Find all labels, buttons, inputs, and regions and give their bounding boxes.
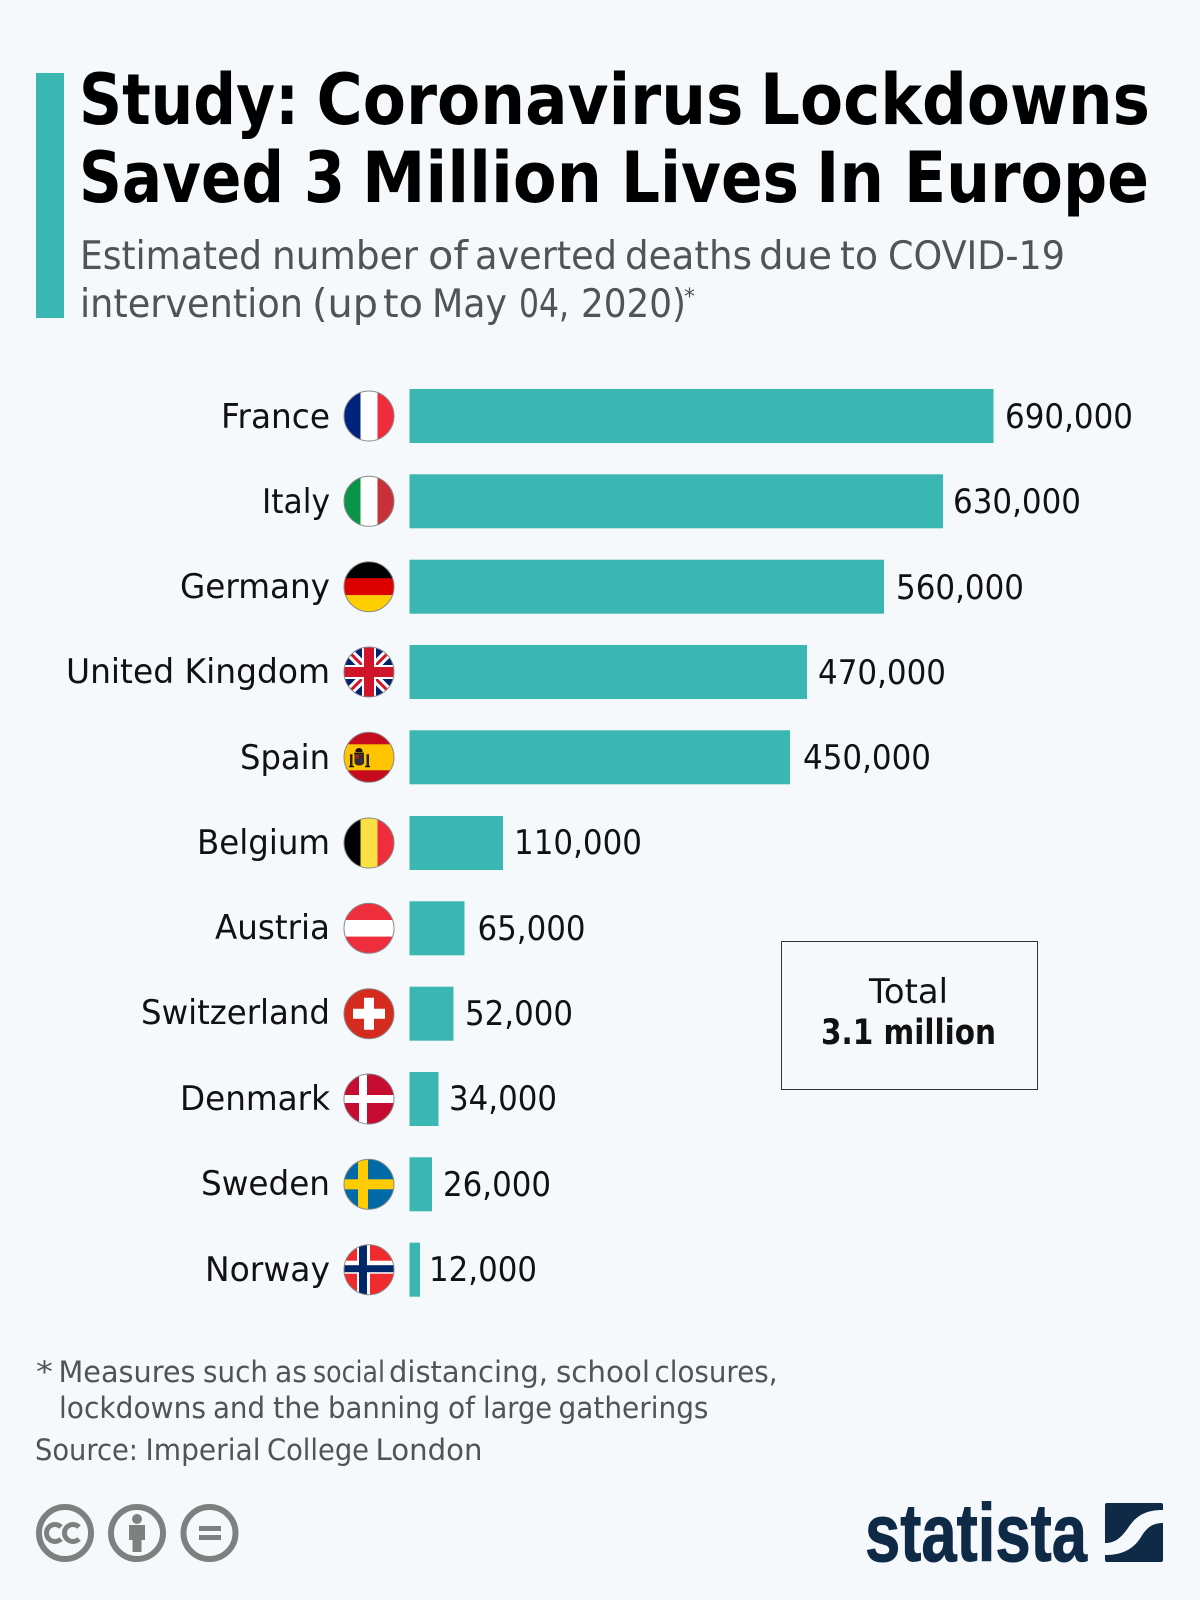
flag: Belgium [344,818,394,868]
source: London [376,1433,482,1467]
subtitle: number [272,234,419,279]
flag: France [344,391,394,441]
row: Switzerland: Switzerland [141,993,330,1033]
title: In [816,137,884,219]
value: Belgium: 110,000 [514,823,642,863]
source: Source: [35,1433,138,1467]
title: Lockdowns [760,59,1150,141]
flag: Spain [344,732,394,782]
icon: attribution [111,1507,163,1559]
value: Germany: 560,000 [896,568,1024,608]
subtitle: intervention [80,282,303,327]
subtitle: averted [475,234,617,279]
flag: Norway [344,1245,394,1295]
row: Norway [205,1243,537,1297]
bar: Belgium [410,816,503,870]
value: Spain: 450,000 [803,738,931,778]
footnote: banning [328,1391,440,1425]
subtitle: to [383,282,423,327]
bar: Norway [410,1243,420,1297]
flag: United Kingdom [344,647,394,697]
bar: France [410,389,994,443]
flag: Germany [344,562,394,612]
callout: total: 3.1 million [821,1013,996,1053]
value: Norway: 12,000 [429,1250,537,1290]
bar chart [66,389,1133,1297]
title: Lives [621,137,799,219]
callout: total: Total [868,972,948,1012]
footnote: social [313,1355,385,1389]
footnote: large [483,1391,552,1425]
bar: Sweden [410,1157,432,1211]
value: Denmark: 34,000 [449,1079,557,1119]
bar: Germany [410,560,884,614]
icon: no derivatives [184,1507,236,1559]
row: Germany [180,560,1024,614]
footnote: such [203,1355,268,1389]
subtitle: to [840,234,878,279]
source [35,1433,482,1467]
subtitle: May [432,282,507,327]
row: Spain [240,730,931,784]
subtitle: 2020) [581,282,686,327]
footnote: * [36,1355,53,1389]
subtitle: of [428,234,469,279]
footnote: gatherings [558,1391,708,1425]
subtitle [80,234,1065,327]
flag: Italy [344,476,394,526]
title [79,59,1150,219]
row: Sweden [201,1157,551,1211]
callout: total [782,942,1038,1090]
flag: Austria [344,903,394,953]
row: Norway: Norway [205,1250,330,1290]
bar: Spain [410,730,790,784]
row: Germany: Germany [180,567,330,607]
bar: Denmark [410,1072,438,1126]
row: Belgium [197,816,642,870]
footnote: the [273,1391,320,1425]
footnote: of [448,1391,476,1425]
value: Sweden: 26,000 [443,1165,551,1205]
title accent bar [36,73,64,318]
footnote [36,1355,778,1425]
title: 3 [304,137,345,219]
subtitle: COVID-19 [888,234,1065,279]
title: Million [362,137,602,219]
value: Switzerland: 52,000 [465,994,573,1034]
subtitle: deaths [625,234,752,279]
footnote: lockdowns [59,1391,206,1425]
source: College [267,1433,369,1467]
value: Italy: 630,000 [953,482,1081,522]
row: Italy: Italy [262,482,330,522]
footnote: and [213,1391,265,1425]
row: United Kingdom [66,645,946,699]
bar: Austria [410,901,464,955]
row: France: France [221,397,330,437]
flag: Switzerland [344,989,394,1039]
bar: Switzerland [410,987,454,1041]
row: Spain: Spain [240,738,330,778]
row: Austria: Austria [215,908,330,948]
bar: Italy [410,474,943,528]
value: United Kingdom: 470,000 [818,653,946,693]
title: Study: [79,59,299,141]
row: United Kingdom: United Kingdom [66,652,330,692]
row: Switzerland [141,987,573,1041]
value: France: 690,000 [1005,397,1133,437]
value: Austria: 65,000 [478,909,586,949]
icon: creative commons [39,1507,91,1559]
logo: statista: statista [865,1488,1088,1579]
subtitle: (up [312,282,378,327]
footnote: school [556,1355,650,1389]
flag: Sweden [344,1159,394,1209]
row: Denmark: Denmark [180,1079,330,1119]
row: Sweden: Sweden [201,1164,330,1204]
row: France [221,389,1133,443]
flag: Denmark [344,1074,394,1124]
row: Denmark [180,1072,557,1126]
subtitle: due [759,234,832,279]
bar: United Kingdom [410,645,807,699]
row: Austria [215,901,586,955]
row: Italy [262,474,1081,528]
subtitle: 04, [519,282,569,327]
title: Europe [904,137,1149,219]
footnote: distancing, [389,1355,548,1389]
source: Imperial [146,1433,260,1467]
subtitle: * [684,285,695,310]
subtitle: Estimated [80,234,262,279]
footnote: as [275,1355,307,1389]
row: Belgium: Belgium [197,823,330,863]
title: Coronavirus [316,59,744,141]
title: Saved [79,137,284,219]
footnote: Measures [58,1355,196,1389]
footnote: closures, [654,1355,778,1389]
